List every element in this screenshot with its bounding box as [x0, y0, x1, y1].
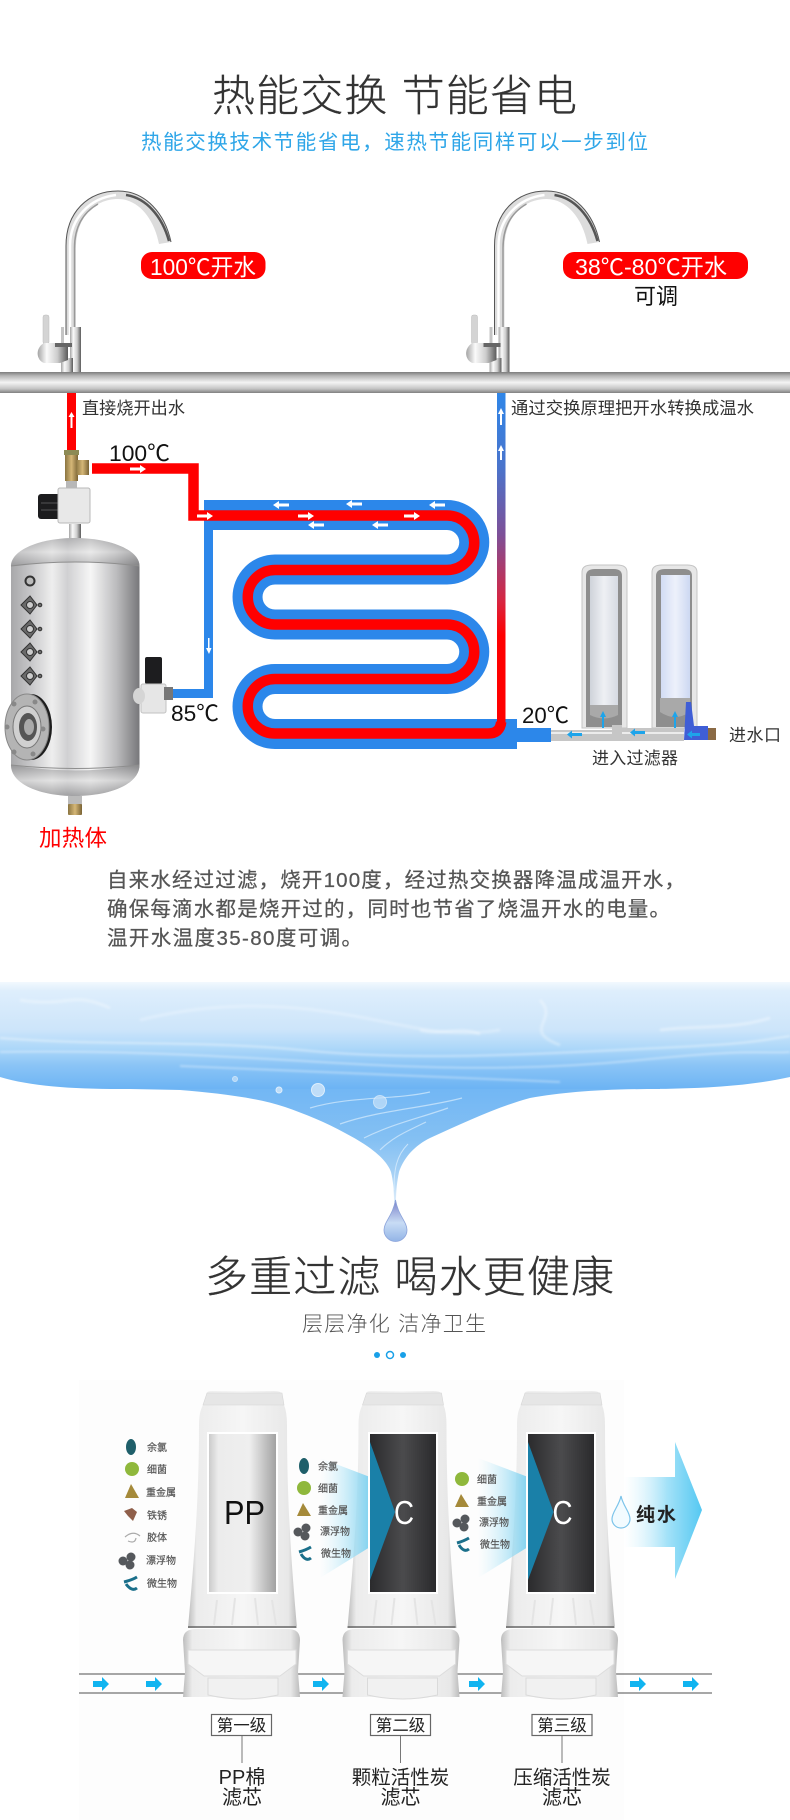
granular carbon window — [369, 1433, 437, 1593]
pipe: red hot coil — [92, 468, 501, 734]
subtitle: layered purification: 层层净化 洁净卫生 — [302, 1313, 486, 1336]
pipe: heat exchanger blue coil — [204, 515, 517, 734]
contaminants list: stage two — [294, 1458, 351, 1560]
water surface with falling drip — [0, 982, 790, 1202]
stage two label: 第二级 — [376, 1716, 425, 1735]
counter top bar — [0, 372, 790, 393]
callout: 100C boiling water: 100℃开水 — [150, 254, 256, 280]
stage three label: 滤芯 — [542, 1786, 582, 1809]
stage two label — [352, 1714, 449, 1809]
contaminants list: stage two: 余氯 — [318, 1460, 338, 1473]
contaminants list: stage one: 漂浮物 — [146, 1554, 176, 1567]
compressed carbon window: C — [552, 1494, 572, 1531]
arrows in pipes — [130, 408, 504, 654]
icon: left faucet — [38, 191, 171, 372]
icon: heater flange — [4, 694, 52, 760]
water bubbles — [232, 1076, 386, 1108]
filter housing left — [582, 565, 627, 728]
compressed carbon window — [527, 1433, 595, 1593]
filter cartridge: granular carbon — [342, 1391, 460, 1699]
PP filter window — [208, 1433, 277, 1593]
icon: bottom drain — [68, 796, 82, 815]
pipe: warm water exit rising — [497, 393, 506, 725]
big pure water arrow — [624, 1442, 702, 1579]
icon: stainless heater tank — [4, 538, 140, 815]
panel: filter stages background — [79, 1380, 624, 1820]
label: 100C: 100℃ — [109, 441, 170, 466]
decorative dots — [374, 1352, 406, 1358]
label: direct boiled output: 直接烧开出水 — [82, 399, 185, 418]
PP filter window: PP — [224, 1494, 265, 1531]
callout: 38-80C adjustable water — [563, 252, 748, 309]
contaminants list: stage three: 重金属 — [477, 1495, 507, 1508]
subtitle: heat exchange: 热能交换技术节能省电，速热节能同样可以一步到位 — [141, 131, 648, 154]
filter housing right — [652, 565, 697, 728]
title: multi-stage filtering: 多重过滤 喝水更健康 — [205, 1254, 614, 1302]
title: heat exchange: 热能交换 节能省电 — [212, 73, 577, 121]
icon: water drop — [384, 1200, 407, 1242]
stage one label — [212, 1714, 272, 1809]
label: heating body: 加热体 — [39, 826, 107, 851]
contaminants list: stage two: 漂浮物 — [320, 1525, 350, 1538]
label: 20C: 20℃ — [522, 703, 569, 728]
callout: 38-80C adjustable water: 38℃-80℃开水 — [575, 254, 727, 280]
filter cartridge: PP — [183, 1391, 300, 1699]
contaminants list: stage one: 铁锈 — [147, 1509, 167, 1522]
contaminants list: stage two: 微生物 — [321, 1547, 351, 1560]
stage two label: 滤芯 — [380, 1786, 420, 1809]
label: pure water: 纯水 — [636, 1504, 676, 1526]
stage one label: PP棉 — [219, 1766, 265, 1789]
icon: lower solenoid valve — [133, 657, 173, 713]
contaminants list: stage one — [118, 1439, 177, 1590]
stage three label: 第三级 — [537, 1716, 587, 1735]
text block: explanation: 自来水经过过滤，烧开100度，经过热交换器降温成温开水， — [107, 869, 685, 892]
chart: flow fan into stage three — [478, 1458, 528, 1578]
contaminants list: stage one: 胶体 — [147, 1531, 167, 1544]
chart: flow fan into stage two — [320, 1458, 370, 1578]
pipe: blue inlet stub — [515, 728, 551, 742]
filter line pipe — [79, 1674, 712, 1693]
filter pipe — [551, 725, 684, 741]
stage three label — [513, 1714, 611, 1809]
cone ripples — [310, 1092, 462, 1190]
contaminants list: stage three: 细菌 — [477, 1473, 497, 1486]
label: heat exchange converts to warm water: 通过交换原理把开水转换成温水 — [511, 398, 754, 418]
water cone — [130, 1080, 660, 1202]
callout: 38-80C adjustable water: 可调 — [634, 284, 678, 309]
contaminants list: stage three: 微生物 — [480, 1538, 510, 1551]
blue inlet valve — [684, 702, 708, 740]
contaminants list: stage three: 漂浮物 — [479, 1516, 509, 1529]
contaminants list: stage one: 余氯 — [147, 1441, 167, 1454]
stage one label: 滤芯 — [222, 1786, 262, 1809]
stage one label: 第一级 — [217, 1716, 266, 1735]
pipe: direct boiling outlet — [67, 393, 76, 453]
icon: twin water filters — [551, 565, 716, 741]
icon: tank top port — [26, 576, 34, 586]
label: 85C: 85℃ — [171, 701, 219, 726]
icon: top brass valve and solenoid — [38, 450, 90, 539]
icon: pure water drop — [612, 1496, 630, 1528]
contaminants list: stage one: 重金属 — [146, 1486, 176, 1499]
filter cartridge: compressed carbon — [501, 1391, 618, 1699]
water ripples — [0, 1000, 790, 1082]
stage two label: 颗粒活性炭 — [352, 1767, 449, 1789]
stage three label: 压缩活性炭 — [513, 1767, 611, 1789]
label: enter filter: 进入过滤器 — [592, 749, 678, 768]
contaminants list: stage three — [452, 1472, 510, 1551]
pipe: blue cold return — [171, 526, 208, 694]
icon: right faucet — [466, 191, 600, 372]
icon: heater thermostats — [21, 596, 42, 685]
flow arrows on pipe — [93, 1677, 699, 1691]
label: water inlet: 进水口 — [729, 726, 781, 745]
text block: explanation: 温开水温度35-80度可调。 — [107, 927, 362, 950]
contaminants list: stage two: 重金属 — [318, 1504, 348, 1517]
blue flow arrows — [567, 711, 700, 738]
text block: explanation — [107, 869, 685, 950]
text block: explanation: 确保每滴水都是烧开过的，同时也节省了烧温开水的电量。 — [107, 898, 670, 921]
contaminants list: stage two: 细菌 — [318, 1482, 338, 1495]
granular carbon window: C — [394, 1494, 414, 1531]
water sheet — [0, 982, 790, 1089]
contaminants list: stage one: 微生物 — [147, 1577, 177, 1590]
contaminants list: stage one: 细菌 — [147, 1463, 167, 1476]
